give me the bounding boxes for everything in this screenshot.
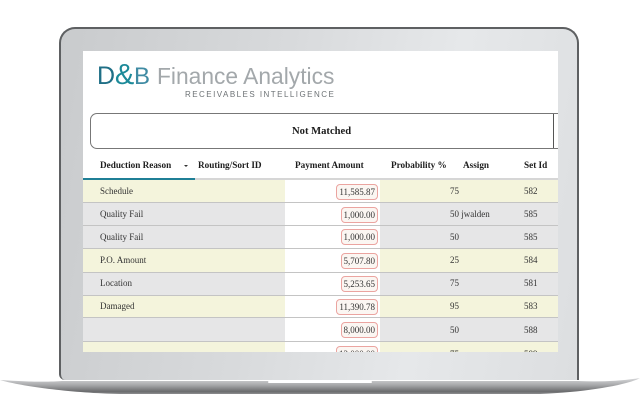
row: Schedule <box>83 180 558 203</box>
row: Quality Fail 1: Quality Fail <box>100 209 143 219</box>
row: Damaged: 11,390.78 <box>339 302 375 312</box>
table header: Probability % <box>391 160 447 170</box>
table header: Routing/Sort ID <box>198 160 262 170</box>
row: P.O. Amount: P.O. Amount <box>100 255 146 265</box>
row: Schedule: 75 <box>450 186 459 196</box>
screen <box>83 51 558 352</box>
row: clipped <box>83 342 558 366</box>
row: blank reason <box>83 318 558 342</box>
active tab underline <box>83 178 195 180</box>
row: Location <box>83 273 558 296</box>
row: Damaged <box>83 296 558 318</box>
table header: Deduction Reason <box>100 160 171 170</box>
header rule <box>83 178 558 180</box>
row: Schedule: 582 <box>524 186 538 196</box>
row: Schedule: 11,585.87 <box>339 187 375 197</box>
row: Schedule: Schedule <box>100 186 133 196</box>
row: P.O. Amount: 25 <box>450 255 459 265</box>
row: Quality Fail 2: 1,000.00 <box>344 232 375 242</box>
row: Location: 5,253.65 <box>344 279 375 289</box>
laptop base <box>0 378 640 394</box>
panel: Not Matched <box>90 113 558 149</box>
row: Location: Location <box>100 278 132 288</box>
row: Quality Fail 2: 585 <box>524 232 538 242</box>
logo: D&B mark: D&B <box>97 59 150 91</box>
row: Quality Fail 1 <box>83 203 558 226</box>
row: Damaged: 95 <box>450 301 459 311</box>
row: P.O. Amount <box>83 249 558 273</box>
row: Quality Fail 2: Quality Fail <box>100 232 143 242</box>
logo <box>97 59 335 99</box>
panel title: Not Matched <box>292 126 351 137</box>
table rows <box>83 180 558 352</box>
table header <box>83 160 558 180</box>
row: Location: 581 <box>524 278 538 288</box>
logo: Finance Analytics: Finance Analytics <box>157 63 334 89</box>
row: blank reason: 50 <box>450 325 459 335</box>
row: Quality Fail 1: 50 jwalden <box>450 209 490 219</box>
row: Damaged: Damaged <box>100 301 134 311</box>
row: Quality Fail 2: 50 <box>450 232 459 242</box>
row: blank reason: 588 <box>524 325 538 335</box>
table header: Set Id <box>524 160 547 170</box>
row: Quality Fail 1: 585 <box>524 209 538 219</box>
logo: tagline: RECEIVABLES INTELLIGENCE <box>185 90 335 99</box>
row: Damaged: 583 <box>524 301 538 311</box>
row: Location: 75 <box>450 278 459 288</box>
row: blank reason: 8,000.00 <box>344 325 375 335</box>
table header: Payment Amount <box>295 160 364 170</box>
table header: Assign <box>463 160 489 170</box>
panel divider <box>553 114 554 148</box>
laptop lid <box>59 27 579 380</box>
row: P.O. Amount: 5,707.80 <box>344 256 375 266</box>
sort arrow <box>184 165 188 167</box>
row: Quality Fail 1: 1,000.00 <box>344 210 375 220</box>
row: P.O. Amount: 584 <box>524 255 538 265</box>
row: Quality Fail 2 <box>83 226 558 249</box>
